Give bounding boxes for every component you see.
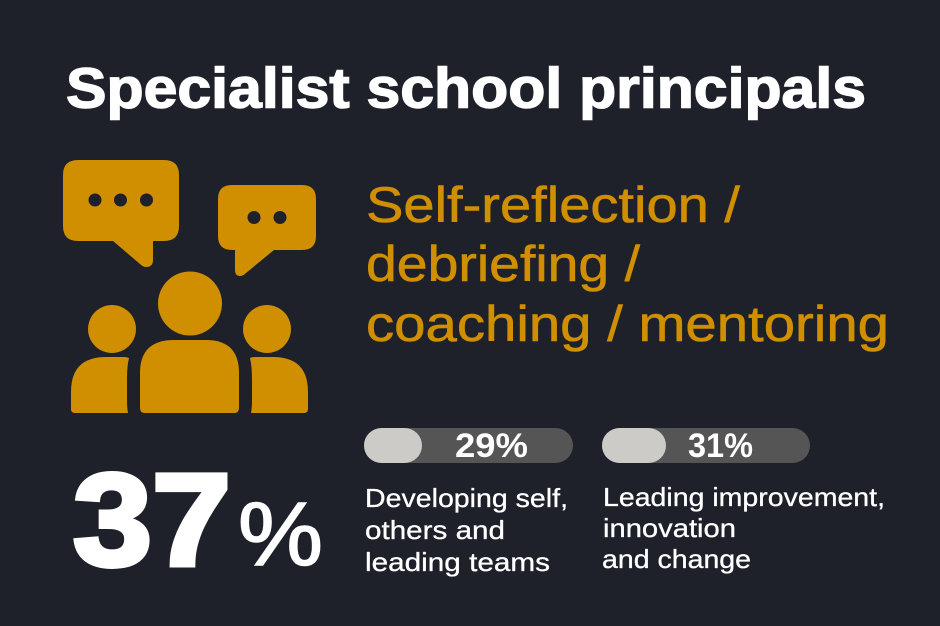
label: developing self, others and leading teams: others and <box>365 515 505 545</box>
icon: people talking with speech bubbles <box>63 160 316 413</box>
heading: self-reflection topic: coaching / mentoring <box>366 296 889 352</box>
bar chart: developing self 29% <box>364 427 573 465</box>
main statistic: 37%: % <box>238 485 323 585</box>
icon: large speech bubble <box>63 160 179 267</box>
bar chart: leading improvement 31%: 31% <box>688 427 753 465</box>
icon: left person <box>71 305 136 413</box>
label: leading improvement, innovation and change: and change <box>602 544 751 574</box>
title: Specialist school principals <box>66 56 866 120</box>
icon: centre person <box>140 272 239 413</box>
label: leading improvement, innovation and change: innovation <box>603 513 736 543</box>
heading: self-reflection topic: Self-reflection / <box>366 177 740 233</box>
icon: small speech bubble <box>218 185 316 276</box>
bar chart: leading improvement 31% <box>602 427 810 465</box>
label: leading improvement, innovation and change: Leading improvement, <box>603 482 885 512</box>
bar chart: developing self 29%: 29% <box>455 427 528 465</box>
heading: self-reflection topic: debriefing / <box>366 236 640 292</box>
label: leading improvement, innovation and change <box>602 482 885 574</box>
icon: right person <box>243 305 308 413</box>
heading: self-reflection topic <box>366 177 889 352</box>
main statistic: 37% <box>73 446 323 593</box>
label: developing self, others and leading teams: leading teams <box>365 547 550 577</box>
label: developing self, others and leading teams: Developing self, <box>365 483 568 513</box>
label: developing self, others and leading teams <box>365 483 568 577</box>
main statistic: 37%: 37 <box>73 446 231 593</box>
